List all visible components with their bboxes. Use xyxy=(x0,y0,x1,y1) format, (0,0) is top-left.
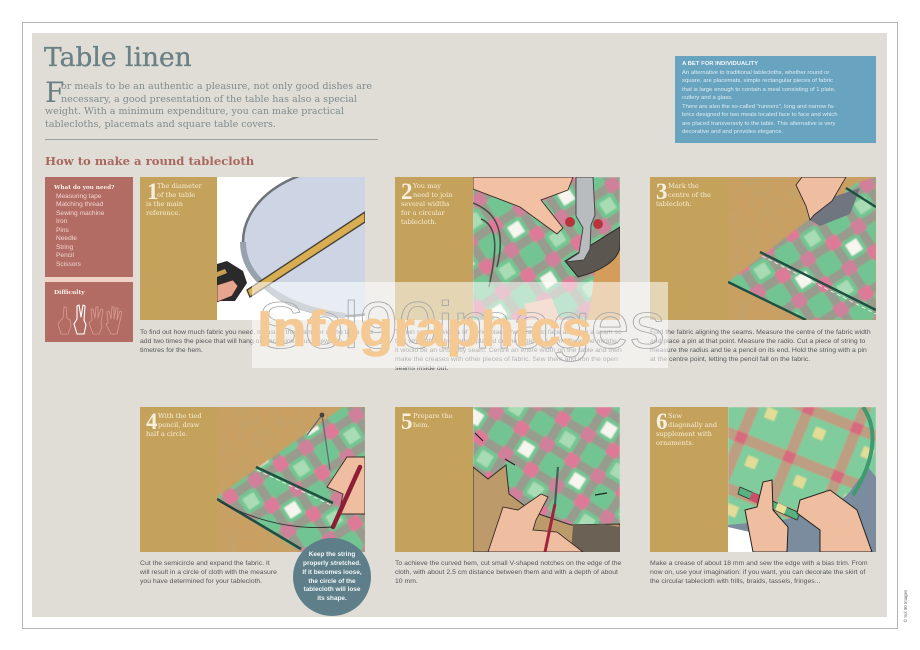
step 1 text: reference. xyxy=(146,209,180,217)
step 6 label xyxy=(650,407,728,552)
step 2 caption: To join several widths of fabric, place them face to face and sew a seam so xyxy=(395,329,622,336)
step 6 text: diagonally and xyxy=(668,421,717,429)
step 6 caption: the circular tablecloth with frills, braids, tassels, fringes... xyxy=(650,578,820,585)
step 2 caption: that when the tablecloth is placed on the table no seam falls in the middle; xyxy=(395,338,619,345)
step 1 label xyxy=(140,177,218,320)
step 4 label xyxy=(140,407,218,552)
panel: what do you need: Matching thread xyxy=(56,201,103,208)
illustration: drawing half a circle xyxy=(217,407,365,552)
step 1 number: 1 xyxy=(147,179,158,204)
step 5 caption xyxy=(395,560,621,585)
step 4 caption: will result in a circle of cloth with the measure xyxy=(140,569,277,576)
panel: what do you need: What do you need? xyxy=(54,185,114,191)
icon: difficulty hands xyxy=(58,304,122,334)
intro paragraph xyxy=(45,81,372,130)
step 5 text: hem. xyxy=(413,421,430,429)
step 2 text: You may xyxy=(413,182,441,190)
step 6 text xyxy=(656,412,717,447)
step 3 label xyxy=(650,177,728,320)
callout: keep the string stretched: its shape. xyxy=(317,595,347,602)
callout: keep the string stretched: Keep the string xyxy=(309,551,355,558)
section heading: How to make a round tablecloth xyxy=(45,154,254,168)
panel: what do you need: Scissors xyxy=(56,261,81,268)
step 3 caption: Fold the fabric aligning the seams. Measure the centre of the fabric width xyxy=(650,329,871,336)
step 2 caption: it would be an unsightly seam. Centre an entire width on the table and then xyxy=(395,347,622,354)
step 5 caption: cloth, with about 2.5 cm distance between them and with a depth of about xyxy=(395,569,618,576)
step 5 number: 5 xyxy=(401,409,412,434)
step 2 number: 2 xyxy=(401,179,412,204)
callout: a bet for individuality: An alternative to traditional tablecloths, whether round or xyxy=(682,70,829,76)
step 4 text xyxy=(146,412,202,438)
step 1 caption: add two times the piece that will hang on each side, plus a few cen- xyxy=(140,338,344,345)
step 1 caption xyxy=(140,329,373,354)
step 4 caption: Cut the semicircle and expand the fabric. It xyxy=(140,560,270,567)
step 5 text: Prepare the xyxy=(413,412,453,420)
step 3 caption: at the centre point, letting the pencil fall on the fabric. xyxy=(650,356,810,363)
callout: keep the string stretched xyxy=(293,538,371,616)
drop cap: F xyxy=(45,76,64,109)
panel: what do you need: Pencil xyxy=(56,252,74,259)
step 1 text xyxy=(146,182,202,217)
illustration: cutting notches in the hem xyxy=(473,407,620,552)
step 3 caption: and place a pin at that point. Measure the radio. Cut a piece of string to xyxy=(650,338,865,345)
step 6 text: supplement with xyxy=(656,430,712,438)
step 1 text: is the main xyxy=(146,200,183,208)
step 5 label xyxy=(395,407,473,552)
watermark text: Infographics xyxy=(257,301,592,357)
watermark band xyxy=(252,282,668,368)
callout: a bet for individuality: that is large enough to contain a meal consisting of 1 plate, xyxy=(682,86,836,92)
divider line xyxy=(45,139,378,140)
step 3 number: 3 xyxy=(656,179,668,204)
step 1 text: The diameter xyxy=(157,182,202,190)
step 2 text xyxy=(401,182,452,226)
callout: a bet for individuality xyxy=(675,56,876,143)
callout: keep the string stretched: the circle of the xyxy=(308,578,356,585)
step 4 number: 4 xyxy=(146,409,158,434)
step 2 text: need to join xyxy=(413,191,452,199)
intro text block: necessary, a good presentation of the table has also a special xyxy=(61,94,357,104)
callout: keep the string stretched: If it becomes loose, xyxy=(302,569,362,576)
step 4 caption xyxy=(140,560,277,585)
step 6 number: 6 xyxy=(656,409,668,434)
panel: what do you need: String xyxy=(56,244,73,251)
callout: a bet for individuality: A BET FOR INDIVIDUALITY xyxy=(682,61,758,67)
step 6 text: Sew xyxy=(668,412,682,420)
panel: what do you need: Needle xyxy=(56,235,77,242)
title: Table linen xyxy=(44,42,192,73)
step 5 caption: 10 mm. xyxy=(395,578,418,585)
callout: keep the string stretched: properly stretched. xyxy=(303,560,361,567)
step 6 caption: now on, use your imagination: if you want, you can decorate the skirt of xyxy=(650,569,865,576)
panel: what do you need xyxy=(45,177,133,277)
step 2 text: tablecloth. xyxy=(401,218,437,226)
step 4 text: half a circle. xyxy=(146,430,188,438)
step 4 text: pencil, draw xyxy=(158,421,199,429)
step 2 text: several widths xyxy=(401,200,449,208)
watermark text: Sol90images xyxy=(257,288,665,362)
image credit: © Sol 90 Images xyxy=(903,590,908,622)
panel: what do you need: Iron xyxy=(56,218,67,225)
illustration: sewing bias trim xyxy=(728,407,876,552)
callout: keep the string stretched: tablecloth will lose xyxy=(304,586,360,593)
intro text block xyxy=(45,76,372,130)
step 3 caption: measure the radius and tie a pencil on its end. Hold the string with a pin xyxy=(650,347,867,354)
step 5 text xyxy=(413,412,453,429)
callout: a bet for individuality: are placed transversely to the table. This alternative is very xyxy=(682,120,835,126)
step 6 caption xyxy=(650,560,868,585)
callout: a bet for individuality: cutlery and a glass. xyxy=(682,95,733,101)
panel: difficulty xyxy=(45,282,133,342)
step 2 caption xyxy=(395,329,622,372)
step 6 text: ornaments. xyxy=(656,439,694,447)
step 3 text: tablecloth. xyxy=(656,200,692,208)
step 5 caption: To achieve the curved hem, cut small V-shaped notches on the edge of the xyxy=(395,560,621,567)
step 2 label xyxy=(395,177,473,320)
step 1 caption: timetres for the hem. xyxy=(140,347,203,354)
step 6 caption: Make a crease of about 18 mm and sew the edge with a bias trim. From xyxy=(650,560,868,567)
step 3 caption xyxy=(650,329,871,363)
callout: a bet for individuality: square, are placemats, simple rectangular pieces of fabric xyxy=(682,78,833,84)
panel: difficulty: Difficulty xyxy=(54,289,85,296)
illustration: sewing machine joining widths xyxy=(473,177,620,320)
step 2 text: for a circular xyxy=(401,209,445,217)
intro text block: tablecloths, placemats and square table covers. xyxy=(45,119,276,130)
intro text block: or meals to be an authentic a pleasure, not only good dishes are xyxy=(61,81,372,92)
panel: what do you need: Measuring tape xyxy=(56,193,101,200)
step 1 text: of the table xyxy=(157,191,195,199)
intro text block: weight. With a minimum expenditure, you can make practical xyxy=(45,106,344,117)
step 2 caption: make the creases with other pieces of fabric. Sew them and iron the open xyxy=(395,356,618,363)
step 4 caption: you have determined for your tablecloth. xyxy=(140,578,262,585)
step 3 text xyxy=(656,182,711,208)
step 2 caption: seams inside out. xyxy=(395,365,448,372)
callout: a bet for individuality: There are also the so-called "runners", long and narrow fa- xyxy=(682,104,835,110)
step 4 text: With the tied xyxy=(158,412,202,420)
illustration: measuring table diameter xyxy=(217,177,365,320)
callout: a bet for individuality: brics designed for two meals located face to face and which xyxy=(682,112,838,118)
callout: a bet for individuality: decorative and and provides elegance. xyxy=(682,129,783,135)
step 3 text: Mark the xyxy=(668,182,699,190)
pale gap strip xyxy=(45,277,133,282)
step 3 text: centre of the xyxy=(668,191,711,199)
panel: what do you need: Pins xyxy=(56,227,69,234)
illustration: marking the centre xyxy=(728,177,876,320)
panel: what do you need: Sewing machine xyxy=(56,210,104,217)
step 1 caption: To find out how much fabric you need, measure the diameter of the table and xyxy=(140,329,373,336)
